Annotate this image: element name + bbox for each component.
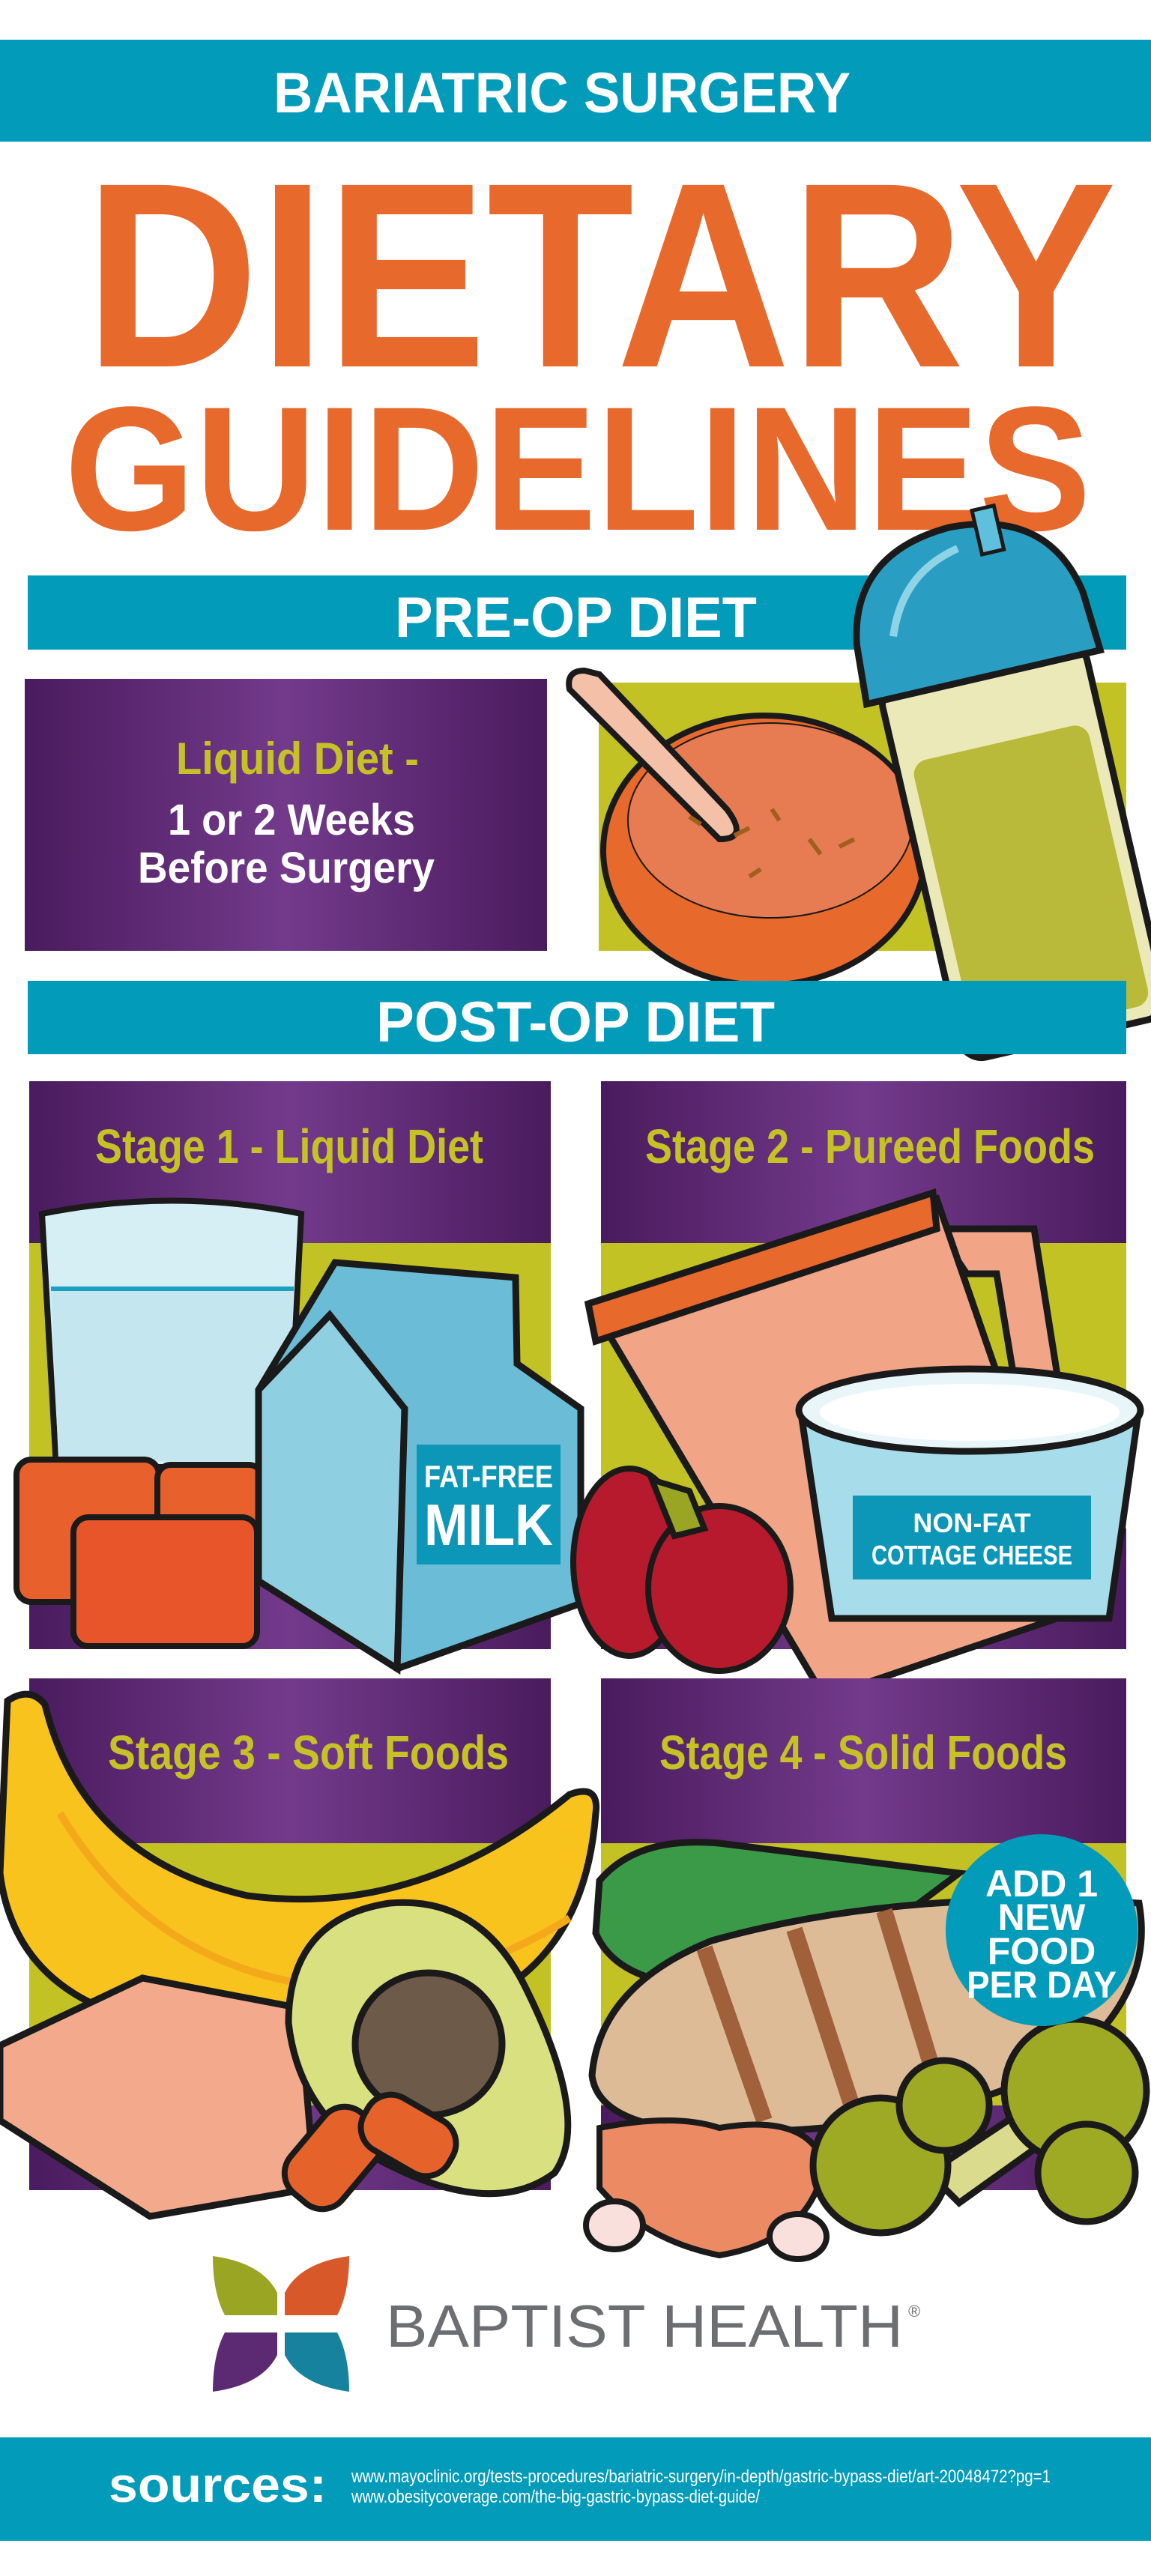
callout: add 1 new food per day: FOOD <box>988 1930 1096 1972</box>
icon: logo petals <box>213 2256 349 2392</box>
callout: add 1 new food per day: NEW <box>998 1896 1086 1938</box>
stage 1 title: Stage 1 - Liquid Diet <box>95 1119 483 1173</box>
callout: add 1 new food per day: PER DAY <box>967 1964 1117 2006</box>
footer: sources: www.obesitycoverage.com/the-big-gastric-bypass-diet-guide/ <box>351 2487 760 2507</box>
header bar <box>0 40 1151 142</box>
icon: baby carrots <box>274 2085 465 2220</box>
panel: stage 1 <box>16 1081 581 1669</box>
icon: milk carton: MILK <box>424 1492 553 1558</box>
panel: stage 2 <box>573 1081 1141 1697</box>
icon: broccoli <box>813 2019 1147 2233</box>
pre-op bar <box>28 575 1126 650</box>
title: GUIDELINES: GUIDELINES <box>64 370 1091 568</box>
stage 3 title: Stage 3 - Soft Foods <box>108 1726 509 1780</box>
callout: add 1 new food per day: ADD 1 <box>985 1863 1098 1905</box>
icon: soup bowl <box>569 671 925 985</box>
icon: shaker bottle <box>830 489 1151 1065</box>
icon: milk carton <box>259 1263 581 1669</box>
footer: sources: www.mayoclinic.org/tests-procedures/bariatric-surgery/in-depth/gastric-bypass-diet/art-20048472?pg=1 <box>351 2467 1051 2487</box>
icon: ice cubes <box>16 1460 262 1646</box>
icon: grilled chicken <box>592 1900 1141 2132</box>
icon: cottage cheese tub <box>799 1369 1141 1618</box>
panel: pre-op liquid diet text: 1 or 2 Weeks <box>168 796 415 844</box>
icon: shrimp <box>586 2120 827 2259</box>
icon: glass of water <box>42 1200 301 1467</box>
panel: stage 4 <box>586 1678 1147 2259</box>
panel: pre-op liquid diet text <box>25 679 547 951</box>
icon: raw chicken <box>0 1978 315 2216</box>
panel: pre-op liquid diet text: Liquid Diet - <box>176 734 419 784</box>
logo: Baptist Health: ® <box>908 2302 920 2320</box>
callout: add 1 new food per day <box>946 1834 1138 2026</box>
panel: pre-op green box <box>599 683 1126 951</box>
logo: Baptist Health <box>213 2256 920 2392</box>
pre-op bar: PRE-OP DIET <box>395 586 757 650</box>
logo: Baptist Health: BAPTIST HEALTH <box>386 2293 903 2359</box>
panel: stage 3 <box>0 1678 596 2220</box>
post-op bar <box>28 981 1126 1054</box>
footer: sources <box>0 2437 1151 2541</box>
icon: milk carton: FAT-FREE <box>424 1459 553 1494</box>
header bar: BARIATRIC SURGERY <box>274 61 851 125</box>
icon: bananas <box>0 1694 596 2035</box>
icon: avocado <box>288 1902 568 2194</box>
icon: blender pitcher <box>588 1193 1083 1697</box>
stage 4 title: Stage 4 - Solid Foods <box>659 1726 1067 1780</box>
icon: cottage cheese tub: NON-FAT <box>913 1508 1031 1538</box>
panel: pre-op liquid diet text: Before Surgery <box>138 844 435 892</box>
icon: strawberries <box>573 1469 791 1671</box>
footer: sources: sources: <box>109 2457 327 2512</box>
post-op bar: POST-OP DIET <box>376 991 775 1054</box>
icon: cottage cheese tub: COTTAGE CHEESE <box>871 1540 1072 1570</box>
icon: cucumber <box>596 1842 959 1986</box>
